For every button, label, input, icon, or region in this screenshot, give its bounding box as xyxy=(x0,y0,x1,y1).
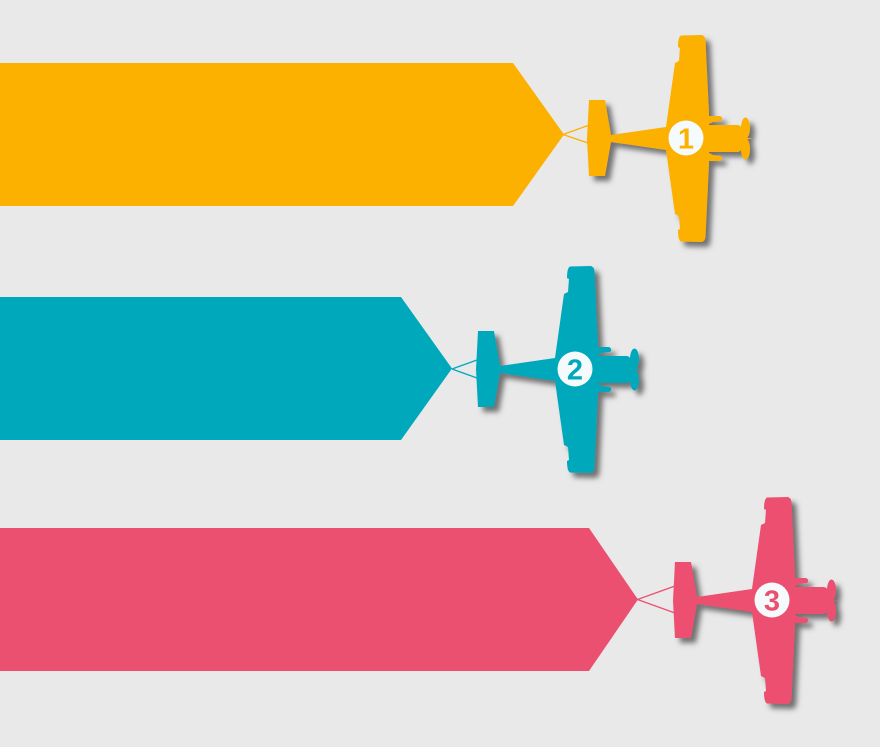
number badge 1 xyxy=(668,120,704,156)
tow lines 2 xyxy=(452,360,477,378)
number badge 2 xyxy=(558,352,592,386)
plane silhouette 1 xyxy=(587,35,752,242)
banner 3 xyxy=(0,528,638,671)
plane 2 xyxy=(476,266,641,473)
banner 1 xyxy=(0,63,564,206)
plane 1 xyxy=(587,35,752,242)
plane silhouette 2 xyxy=(476,266,641,473)
plane 3 xyxy=(673,497,838,704)
plane silhouette 3 xyxy=(673,497,838,704)
number badge 2: 2 xyxy=(567,354,583,386)
tow lines 1 xyxy=(563,126,588,143)
number badge 3: 3 xyxy=(764,586,780,618)
number badge 3 xyxy=(754,582,790,618)
tow lines 3 xyxy=(638,586,675,613)
banner 2 xyxy=(0,297,452,440)
number badge 1: 1 xyxy=(678,124,694,156)
